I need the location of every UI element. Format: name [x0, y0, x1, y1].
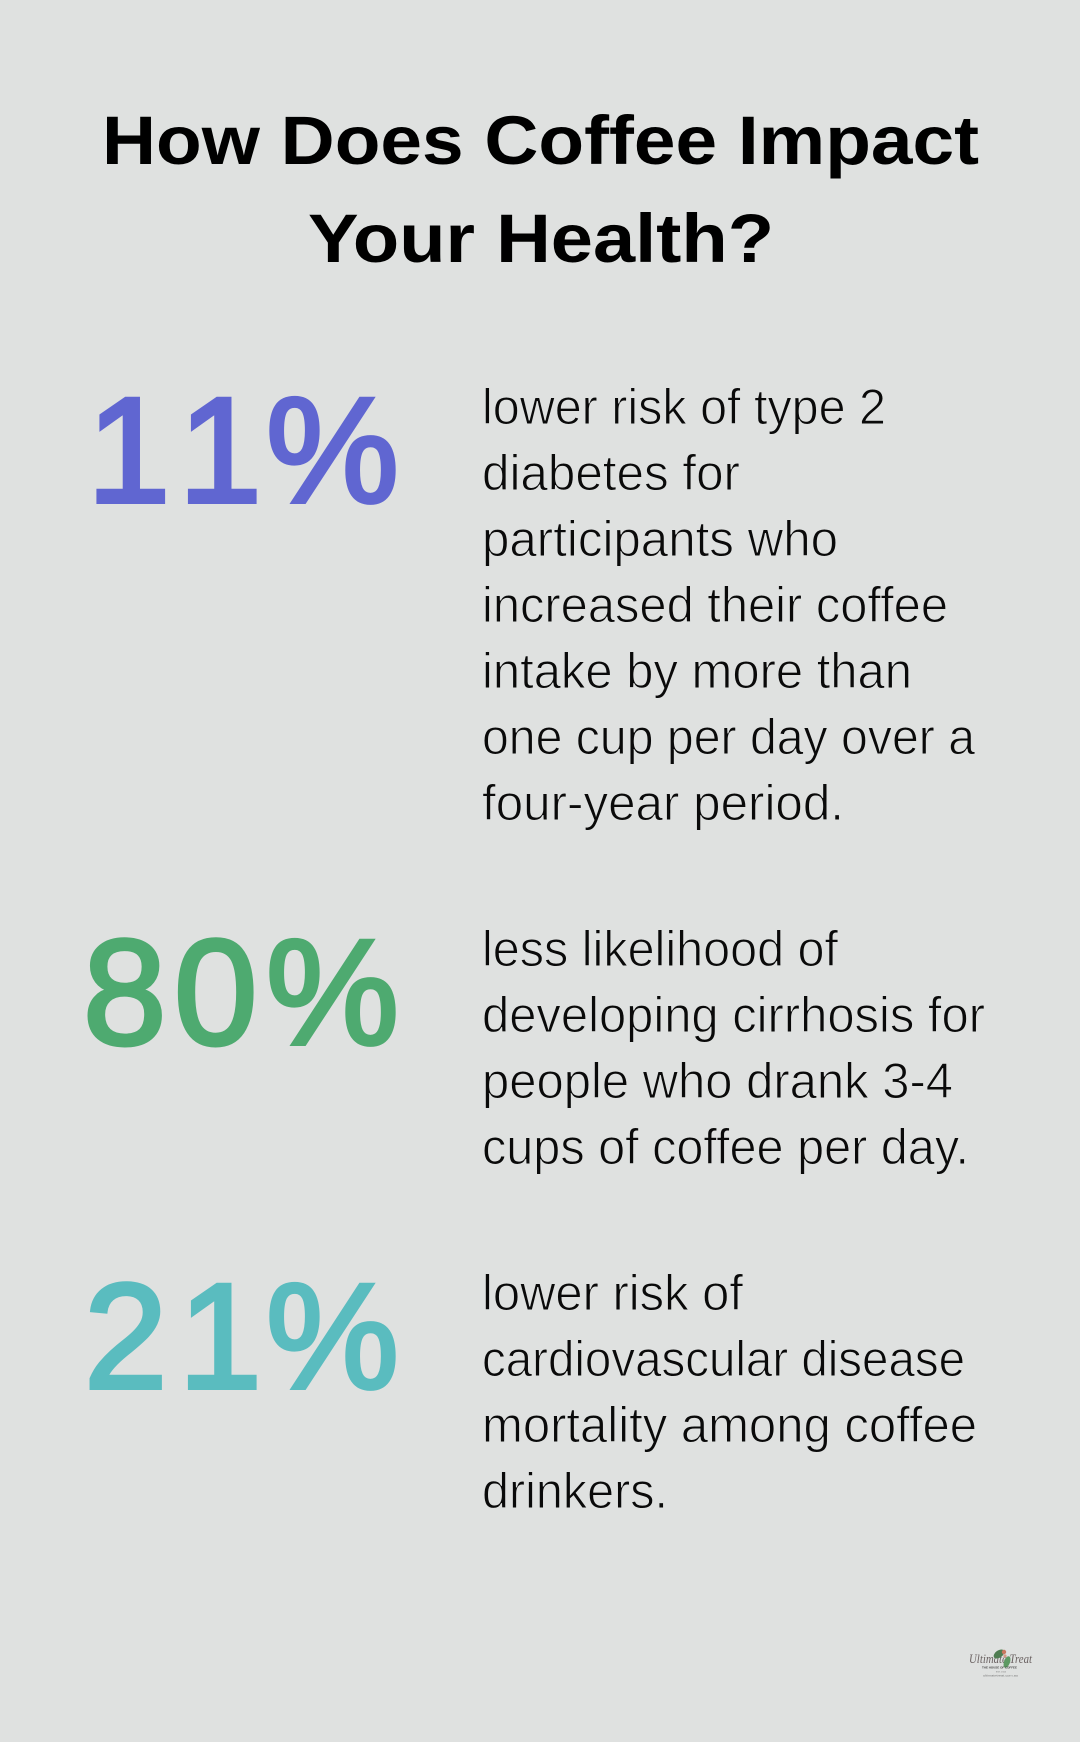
- text block: cirrhosis description: [482, 921, 985, 1175]
- icon: coffee leaves: [992, 1648, 1012, 1669]
- text block: diabetes description: one cup per day over a: [482, 709, 975, 765]
- panel: diabetes statistic: [87, 366, 975, 831]
- logo: Ultimate Treat: THE HOUSE OF COFFEE: [982, 1666, 1017, 1670]
- text block: cardiovascular description: lower risk of: [482, 1265, 743, 1321]
- text block: cardiovascular description: cardiovascular disease: [482, 1331, 965, 1387]
- panel: cirrhosis statistic: [83, 908, 985, 1175]
- text block: diabetes description: intake by more than: [482, 643, 912, 699]
- text block: diabetes description: diabetes for: [482, 445, 740, 501]
- title: How Does Coffee Impact: [102, 102, 979, 179]
- stat: 80%: %: [266, 908, 399, 1076]
- stat: 11%: [87, 366, 399, 534]
- stat: 11%: %: [266, 366, 399, 534]
- logo: Ultimate Treat: ultimatetreat.com.au: [983, 1674, 1018, 1678]
- logo: Ultimate Treat: EST. 1924: [996, 1672, 1007, 1674]
- stat: 21%: %: [266, 1252, 399, 1420]
- text block: cirrhosis description: developing cirrhosis for: [482, 987, 985, 1043]
- text block: diabetes description: increased their coffee: [482, 577, 948, 633]
- text block: cardiovascular description: mortality among coffee: [482, 1397, 977, 1453]
- stat: 21%: [84, 1252, 399, 1420]
- stat: 80%: [83, 908, 399, 1076]
- stat: 11%: 11: [87, 366, 262, 534]
- text block: diabetes description: lower risk of type 2: [482, 379, 886, 435]
- text block: cardiovascular description: drinkers.: [482, 1463, 668, 1519]
- text block: diabetes description: participants who: [482, 511, 838, 567]
- panel: cardiovascular statistic: [84, 1252, 977, 1519]
- title: Your Health?: [308, 200, 774, 277]
- logo: Ultimate Treat: [969, 1648, 1032, 1678]
- title: [102, 102, 979, 277]
- text block: cardiovascular description: [482, 1265, 977, 1519]
- text block: cirrhosis description: people who drank 3-4: [482, 1053, 953, 1109]
- logo: Ultimate Treat: Ultimate Treat: [969, 1651, 1032, 1666]
- text block: diabetes description: four-year period.: [482, 775, 844, 831]
- text block: cirrhosis description: less likelihood of: [482, 921, 838, 977]
- stat: 80%: 80: [83, 908, 257, 1076]
- text block: cirrhosis description: cups of coffee per day.: [482, 1119, 969, 1175]
- stat: 21%: 21: [84, 1252, 262, 1420]
- text block: diabetes description: [482, 379, 975, 831]
